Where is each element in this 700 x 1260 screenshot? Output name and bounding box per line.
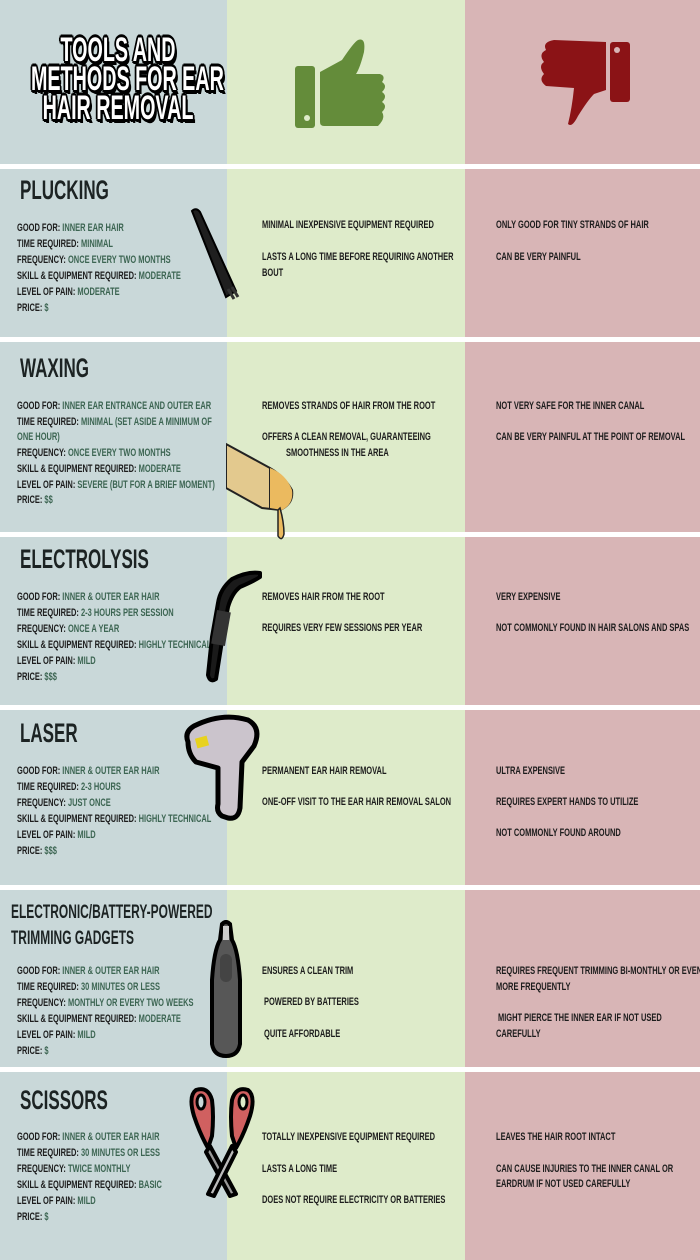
text block: electrolysis details: PRICE: $$$ — [17, 671, 57, 683]
icon: thumbs up — [295, 40, 385, 128]
text block: laser details: LEVEL OF PAIN: MILD — [17, 829, 96, 841]
text block: scissors cons: LEAVES THE HAIR ROOT INTACT — [496, 1131, 615, 1143]
heading: plucking: PLUCKING — [20, 175, 109, 205]
text block: electrolysis details: TIME REQUIRED: 2-3 HOURS PER SESSION — [17, 607, 174, 619]
text block: gadgets pros — [262, 965, 359, 1040]
text block: waxing details: GOOD FOR: INNER EAR ENTRANCE AND OUTER EAR — [17, 400, 211, 412]
text block: electrolysis pros: REQUIRES VERY FEW SESSIONS PER YEAR — [262, 622, 422, 634]
text block: scissors pros: DOES NOT REQUIRE ELECTRICITY OR BATTERIES — [262, 1194, 445, 1206]
text block: gadgets pros: ENSURES A CLEAN TRIM — [262, 965, 353, 977]
text block: plucking pros: BOUT — [262, 267, 283, 279]
text block: waxing pros: OFFERS A CLEAN REMOVAL, GUARANTEEING — [262, 431, 431, 443]
text block: gadgets details: LEVEL OF PAIN: MILD — [17, 1029, 96, 1041]
heading: laser: LASER — [20, 718, 78, 748]
text block: gadgets details: GOOD FOR: INNER & OUTER EAR HAIR — [17, 965, 160, 977]
icon: trimmer — [210, 920, 242, 1058]
text block: waxing details — [17, 400, 215, 506]
text block: laser pros: ONE-OFF VISIT TO THE EAR HAIR REMOVAL SALON — [262, 796, 451, 808]
text block: laser cons: ULTRA EXPENSIVE — [496, 765, 565, 777]
text block: gadgets details: SKILL & EQUIPMENT REQUIRED: MODERATE — [17, 1013, 181, 1025]
text block: laser pros: PERMANENT EAR HAIR REMOVAL — [262, 765, 387, 777]
text block: scissors details: FREQUENCY: TWICE MONTHLY — [17, 1163, 130, 1175]
text block: laser cons: REQUIRES EXPERT HANDS TO UTILIZE — [496, 796, 638, 808]
panel: trimming gadgets — [11, 902, 700, 1058]
icon: scissors — [189, 1087, 255, 1198]
text block: gadgets cons: MIGHT PIERCE THE INNER EAR IF NOT USED — [498, 1012, 662, 1024]
panel: electrolysis — [17, 544, 689, 683]
text block: electrolysis cons — [496, 591, 689, 634]
title: TOOLS AND — [60, 31, 176, 69]
title — [30, 31, 226, 127]
panel: plucking — [17, 175, 649, 314]
text block: plucking details: LEVEL OF PAIN: MODERATE — [17, 286, 120, 298]
panel: laser — [17, 714, 638, 857]
text block: waxing details: SKILL & EQUIPMENT REQUIRED: MODERATE — [17, 463, 181, 475]
text block: laser details: FREQUENCY: JUST ONCE — [17, 797, 111, 809]
text block: electrolysis details: LEVEL OF PAIN: MILD — [17, 655, 96, 667]
text block: gadgets cons: CAREFULLY — [496, 1028, 541, 1040]
icon: thumbs down — [541, 40, 630, 125]
text block: plucking pros: MINIMAL INEXPENSIVE EQUIPMENT REQUIRED — [262, 219, 434, 231]
heading: trimming gadgets: TRIMMING GADGETS — [11, 928, 134, 949]
text block: laser details: PRICE: $$$ — [17, 845, 57, 857]
text block: waxing details: PRICE: $$ — [17, 494, 53, 506]
text block: gadgets details: PRICE: $ — [17, 1045, 49, 1057]
text block: electrolysis details — [17, 591, 211, 683]
text block: scissors details: PRICE: $ — [17, 1211, 49, 1223]
heading: electrolysis: ELECTROLYSIS — [20, 544, 149, 574]
title: HAIR REMOVAL — [43, 89, 193, 127]
text block: waxing cons — [496, 400, 685, 443]
text block: laser pros — [262, 765, 451, 808]
text block: laser details: SKILL & EQUIPMENT REQUIRED: HIGHLY TECHNICAL — [17, 813, 211, 825]
text block: gadgets details: TIME REQUIRED: 30 MINUTES OR LESS — [17, 981, 160, 993]
text block: scissors pros: LASTS A LONG TIME — [262, 1163, 337, 1175]
text block: plucking details: TIME REQUIRED: MINIMAL — [17, 238, 113, 250]
heading: trimming gadgets: ELECTRONIC/BATTERY-POWERED — [11, 902, 213, 923]
text block: scissors details: SKILL & EQUIPMENT REQUIRED: BASIC — [17, 1179, 162, 1191]
text block: gadgets cons: REQUIRES FREQUENT TRIMMING BI-MONTHLY OR EVEN — [496, 965, 700, 977]
text block: waxing pros — [262, 400, 436, 459]
icon: laser device — [184, 714, 260, 821]
text block: gadgets cons — [496, 965, 700, 1040]
text block: electrolysis pros: REMOVES HAIR FROM THE ROOT — [262, 591, 385, 603]
text block: electrolysis details: SKILL & EQUIPMENT REQUIRED: HIGHLY TECHNICAL — [17, 639, 211, 651]
text block: electrolysis details: FREQUENCY: ONCE A YEAR — [17, 623, 119, 635]
icon: tweezers — [190, 208, 240, 300]
text block: electrolysis pros — [262, 591, 422, 634]
text block: scissors cons — [496, 1131, 673, 1190]
text block: laser cons — [496, 765, 638, 839]
text block: gadgets details: FREQUENCY: MONTHLY OR EVERY TWO WEEKS — [17, 997, 193, 1009]
text block: plucking details — [17, 222, 181, 314]
panel: waxing — [17, 353, 685, 540]
text block: scissors pros — [262, 1131, 446, 1206]
text block: scissors details — [17, 1131, 162, 1223]
text block: waxing cons: CAN BE VERY PAINFUL AT THE POINT OF REMOVAL — [496, 431, 685, 443]
text block: scissors details: TIME REQUIRED: 30 MINUTES OR LESS — [17, 1147, 160, 1159]
heading: scissors: SCISSORS — [20, 1085, 108, 1115]
text block: plucking details: FREQUENCY: ONCE EVERY TWO MONTHS — [17, 254, 171, 266]
text block: scissors details: GOOD FOR: INNER & OUTER EAR HAIR — [17, 1131, 160, 1143]
text block: laser details: GOOD FOR: INNER & OUTER EAR HAIR — [17, 765, 160, 777]
text block: scissors cons: CAN CAUSE INJURIES TO THE INNER CANAL OR — [496, 1163, 673, 1175]
text block: plucking pros: LASTS A LONG TIME BEFORE REQUIRING ANOTHER — [262, 251, 454, 263]
text block: gadgets cons: MORE FREQUENTLY — [496, 981, 571, 993]
text block: electrolysis cons: VERY EXPENSIVE — [496, 591, 560, 603]
text block: plucking details: GOOD FOR: INNER EAR HAIR — [17, 222, 124, 234]
text block: waxing details: FREQUENCY: ONCE EVERY TWO MONTHS — [17, 447, 171, 459]
text block: waxing pros: SMOOTHNESS IN THE AREA — [286, 447, 389, 459]
text block: electrolysis details: GOOD FOR: INNER & OUTER EAR HAIR — [17, 591, 160, 603]
heading: trimming gadgets — [11, 902, 213, 949]
text block: waxing details: ONE HOUR) — [17, 431, 60, 443]
title: METHODS FOR EAR — [31, 60, 224, 98]
text block: gadgets pros: POWERED BY BATTERIES — [264, 996, 359, 1008]
text block: waxing details: LEVEL OF PAIN: SEVERE (BUT FOR A BRIEF MOMENT) — [17, 479, 215, 491]
text block: waxing details: TIME REQUIRED: MINIMAL (SET ASIDE A MINIMUM OF — [17, 416, 212, 428]
text block: scissors details: LEVEL OF PAIN: MILD — [17, 1195, 96, 1207]
text block: scissors pros: TOTALLY INEXPENSIVE EQUIPMENT REQUIRED — [262, 1131, 435, 1143]
text block: plucking details: SKILL & EQUIPMENT REQUIRED: MODERATE — [17, 270, 181, 282]
icon: electrolysis pen — [206, 570, 262, 682]
text block: plucking cons — [496, 219, 649, 263]
text block: waxing pros: REMOVES STRANDS OF HAIR FROM THE ROOT — [262, 400, 435, 412]
text block: plucking cons: CAN BE VERY PAINFUL — [496, 251, 581, 263]
text block: plucking cons: ONLY GOOD FOR TINY STRANDS OF HAIR — [496, 219, 649, 231]
text block: plucking details: PRICE: $ — [17, 302, 49, 314]
heading: waxing: WAXING — [20, 353, 89, 383]
text block: gadgets pros: QUITE AFFORDABLE — [264, 1028, 340, 1040]
text block: laser details — [17, 765, 212, 857]
icon: wax spatula — [226, 442, 294, 540]
text block: plucking pros — [262, 219, 454, 279]
text block: scissors cons: EARDRUM IF NOT USED CAREFULLY — [496, 1178, 630, 1190]
text block: laser cons: NOT COMMONLY FOUND AROUND — [496, 827, 621, 839]
text block: electrolysis cons: NOT COMMONLY FOUND IN HAIR SALONS AND SPAS — [496, 622, 689, 634]
text block: waxing cons: NOT VERY SAFE FOR THE INNER CANAL — [496, 400, 644, 412]
text block: gadgets details — [17, 965, 194, 1057]
panel: scissors — [17, 1085, 673, 1223]
text block: laser details: TIME REQUIRED: 2-3 HOURS — [17, 781, 121, 793]
